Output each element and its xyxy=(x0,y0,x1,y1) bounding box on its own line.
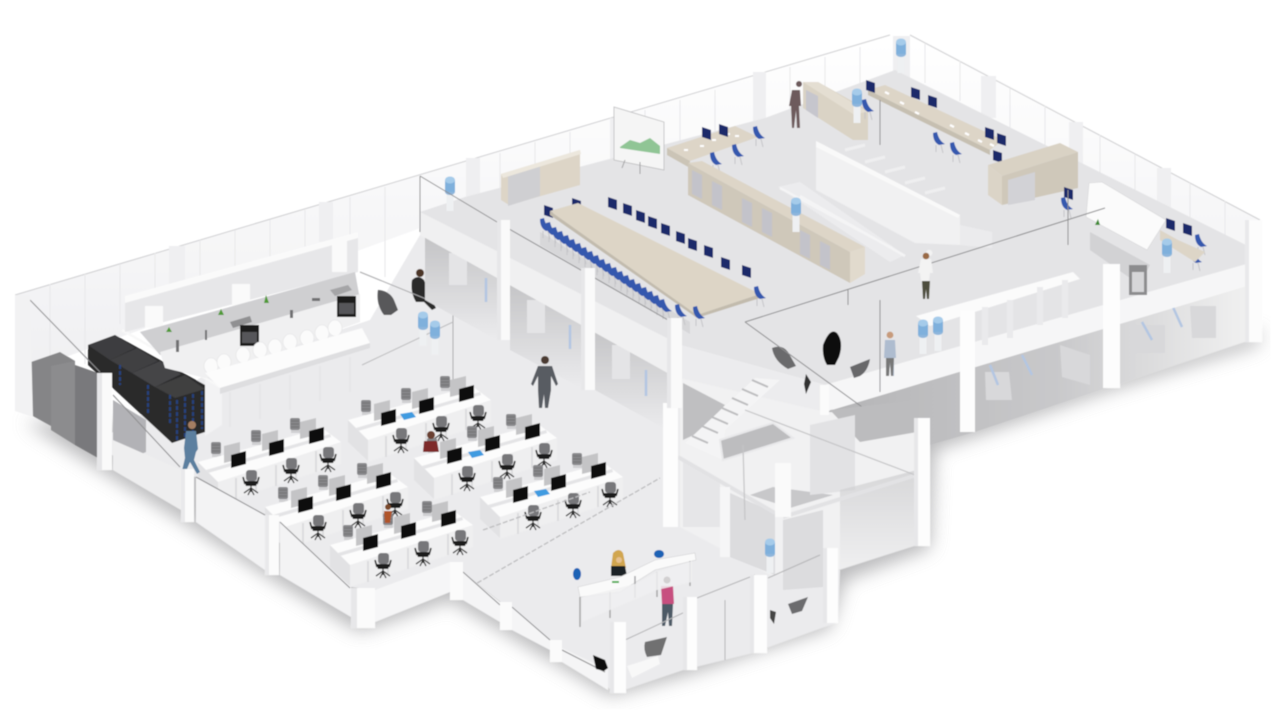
workstation clusters xyxy=(198,376,623,587)
staircase xyxy=(685,378,780,460)
cabinet upper back xyxy=(803,82,868,140)
back table left xyxy=(667,124,765,173)
white shelf and kitchenette xyxy=(1061,182,1207,295)
glass corridor panels xyxy=(113,400,146,466)
white chairs row xyxy=(204,320,342,374)
glass panel right xyxy=(810,415,855,495)
ground shadow xyxy=(25,330,1262,696)
lounge chairs and rail near kitchen xyxy=(360,269,453,400)
central white partition xyxy=(778,141,992,262)
water dispensers upper level xyxy=(445,38,1172,354)
kitchen xyxy=(125,232,370,427)
dark stair well xyxy=(683,383,725,440)
grey strip xyxy=(750,487,833,508)
glass railings xyxy=(420,100,1105,420)
beige cabinet back left xyxy=(501,150,581,206)
structural pillars xyxy=(15,220,1262,693)
ground floor xyxy=(100,235,840,693)
right grey room top xyxy=(830,400,917,442)
mezzanine furniture xyxy=(420,38,1207,420)
long divider cabinet xyxy=(688,161,865,283)
front low walls xyxy=(30,300,820,690)
grey storage cabinets xyxy=(31,352,98,458)
server room xyxy=(31,330,222,466)
conference table chairs back row xyxy=(544,197,751,278)
lounge chairs upper level xyxy=(772,332,870,394)
mezzanine right edge band xyxy=(825,263,1250,412)
conference table xyxy=(550,203,766,318)
lower rooms xyxy=(683,460,720,527)
white bench with chairs xyxy=(916,272,1080,345)
back glass wall xyxy=(15,35,1260,374)
back table right xyxy=(862,80,1006,163)
ovens xyxy=(240,325,259,346)
conference table chairs front row xyxy=(540,218,705,334)
people on ground floor xyxy=(181,356,674,626)
reception desk xyxy=(573,550,696,627)
lounge furniture in entry xyxy=(593,538,808,678)
low lobby partition rail xyxy=(465,478,660,590)
pale right room xyxy=(840,470,917,570)
plants xyxy=(166,295,269,332)
stair landing well xyxy=(720,423,793,460)
wall pillars on back walls xyxy=(169,36,1171,288)
server racks xyxy=(88,335,205,443)
counter cabinets xyxy=(160,294,360,378)
white shelf stacks xyxy=(145,240,347,328)
right cabinets xyxy=(988,143,1078,205)
mezzanine floor xyxy=(420,70,1250,385)
under-mezzanine bays xyxy=(425,232,667,430)
upper cabinets xyxy=(125,236,358,332)
lower right room xyxy=(825,285,1250,445)
white lower room base xyxy=(680,378,917,575)
whiteboard with chart xyxy=(614,107,664,174)
long bar table xyxy=(205,328,370,388)
people upper level xyxy=(789,81,933,376)
stairs and lower glass rooms xyxy=(678,378,923,590)
backsplash xyxy=(140,272,360,355)
mezzanine left edge band xyxy=(420,212,680,380)
